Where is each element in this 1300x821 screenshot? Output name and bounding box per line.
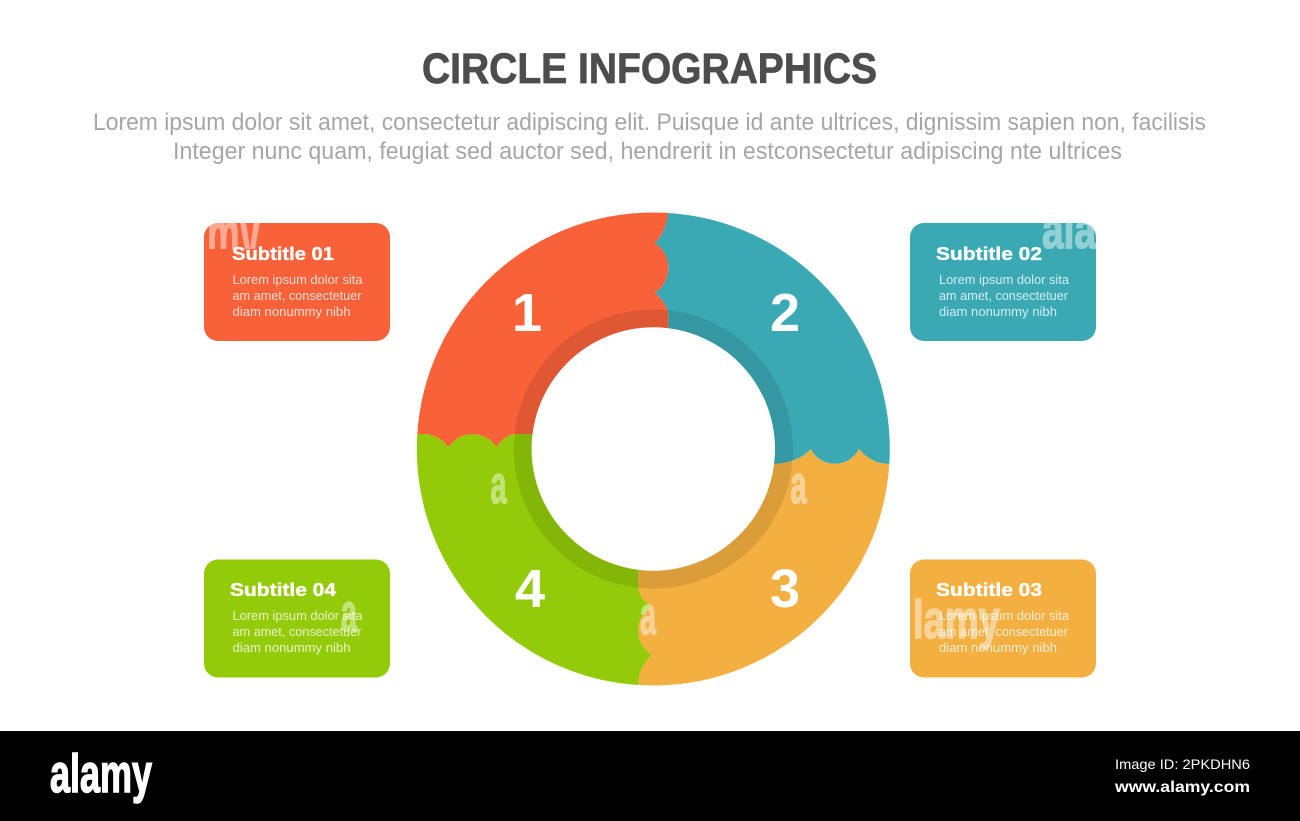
- panel: subtitle 01: Lorem ipsum dolor sita: [232, 272, 363, 287]
- panel: subtitle 01: am amet, consectetuer: [232, 288, 362, 303]
- panel: subtitle 02: diam nonummy nibh: [939, 304, 1057, 319]
- panel: subtitle 01: Subtitle 01: [232, 244, 334, 264]
- panel: subtitle 02: [910, 223, 1096, 341]
- panel: subtitle 01: diam nonummy nibh: [232, 304, 350, 319]
- number 3: 3: [770, 559, 800, 619]
- panel: subtitle 04: Subtitle 04: [230, 580, 336, 600]
- watermark letters on donut: a: [790, 455, 807, 515]
- panel: subtitle 02: Subtitle 02: [936, 244, 1042, 264]
- watermark letters on donut: a: [640, 586, 657, 646]
- number 2: 2: [770, 283, 800, 343]
- watermark letters on donut: [490, 455, 807, 646]
- segment 1: red: [417, 212, 668, 447]
- number 4: 4: [515, 559, 545, 619]
- donut chart: [416, 212, 890, 686]
- panel: subtitle 04: Lorem ipsum dolor sita: [232, 608, 363, 623]
- segment 4: green: [416, 434, 652, 685]
- panel: subtitle 02: am amet, consectetuer: [939, 288, 1069, 303]
- panel: subtitle 04: am amet, consectetuer: [232, 624, 362, 639]
- panel: subtitle 03: diam nonummy nibh: [939, 640, 1057, 655]
- panel: subtitle 03: Subtitle 03: [936, 580, 1042, 600]
- subtitle text: [93, 109, 1206, 165]
- panel: subtitle 04: diam nonummy nibh: [232, 640, 350, 655]
- panel: subtitle 03: Lorem ipsum dolor sita: [939, 608, 1070, 623]
- panel: subtitle 03: lamy: [913, 590, 1000, 650]
- panel: subtitle 04: [204, 560, 390, 678]
- panel: subtitle 04: a: [341, 583, 358, 643]
- center hole: [532, 327, 775, 571]
- subtitle text: Integer nunc quam, feugiat sed auctor sed, hendrerit in estconsectetur adipiscing nte ultrices: [173, 138, 1122, 165]
- website: www.alamy.com: [1114, 779, 1250, 796]
- segment 2: teal: [653, 200, 900, 464]
- subtitle text: Lorem ipsum dolor sit amet, consectetur adipiscing elit. Puisque id ante ultrices, dignissim sapien non, facilisis: [93, 109, 1206, 136]
- number 1: 1: [512, 283, 542, 343]
- inner dark ring: [523, 318, 784, 580]
- panel: subtitle 02: Lorem ipsum dolor sita: [939, 272, 1070, 287]
- segment 3: orange: [638, 449, 900, 700]
- title: CIRCLE INFOGRAPHICS: [422, 45, 877, 93]
- panel: subtitle 02: ala: [1042, 200, 1097, 260]
- panel: subtitle 03: [910, 560, 1096, 678]
- footer logo: alamy: [50, 744, 152, 804]
- panel: subtitle 01: my: [207, 190, 260, 279]
- panel: subtitle 03: am amet, consectetuer: [939, 624, 1069, 639]
- watermark letters on donut: a: [490, 455, 507, 515]
- panel: subtitle 01: [204, 223, 390, 341]
- footer bar: [0, 731, 1300, 821]
- image id: Image ID: 2PKDHN6: [1115, 756, 1250, 772]
